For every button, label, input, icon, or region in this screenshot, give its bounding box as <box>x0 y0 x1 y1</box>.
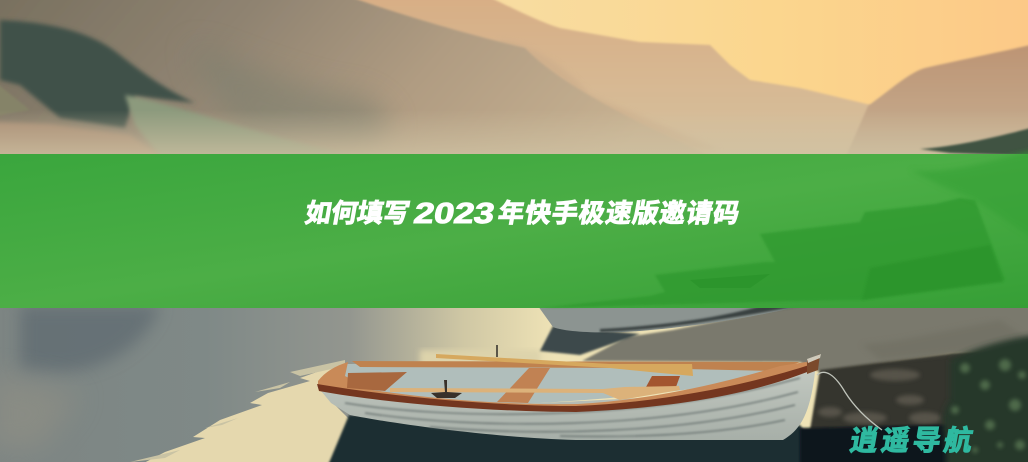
mooring rope <box>817 372 882 430</box>
dark reflection under boat <box>326 415 830 462</box>
foreground shrubs <box>943 335 1028 462</box>
gunwale <box>318 362 812 410</box>
plank at far gunwale <box>352 361 800 371</box>
green title band <box>0 150 1028 308</box>
gravel shore <box>582 303 1028 372</box>
hull <box>317 360 818 440</box>
interior <box>335 362 800 404</box>
title: 年快手极速版邀请码 <box>496 198 742 228</box>
title <box>302 198 742 230</box>
rowing boat <box>317 345 882 440</box>
title: 2023 <box>411 198 497 230</box>
title: 如何填写 <box>303 198 412 228</box>
stem post <box>807 354 820 374</box>
lake and shoreline <box>0 300 1028 462</box>
oarlock <box>431 380 462 398</box>
oars <box>390 386 680 400</box>
faded boats in band <box>540 198 1005 308</box>
thwarts <box>347 372 407 391</box>
sunlit wedge of water <box>140 362 350 462</box>
watermark logo: 逍遥导航 <box>848 424 975 456</box>
background boat behind the band <box>538 306 800 332</box>
background: misty mountain landscape <box>0 0 1028 170</box>
